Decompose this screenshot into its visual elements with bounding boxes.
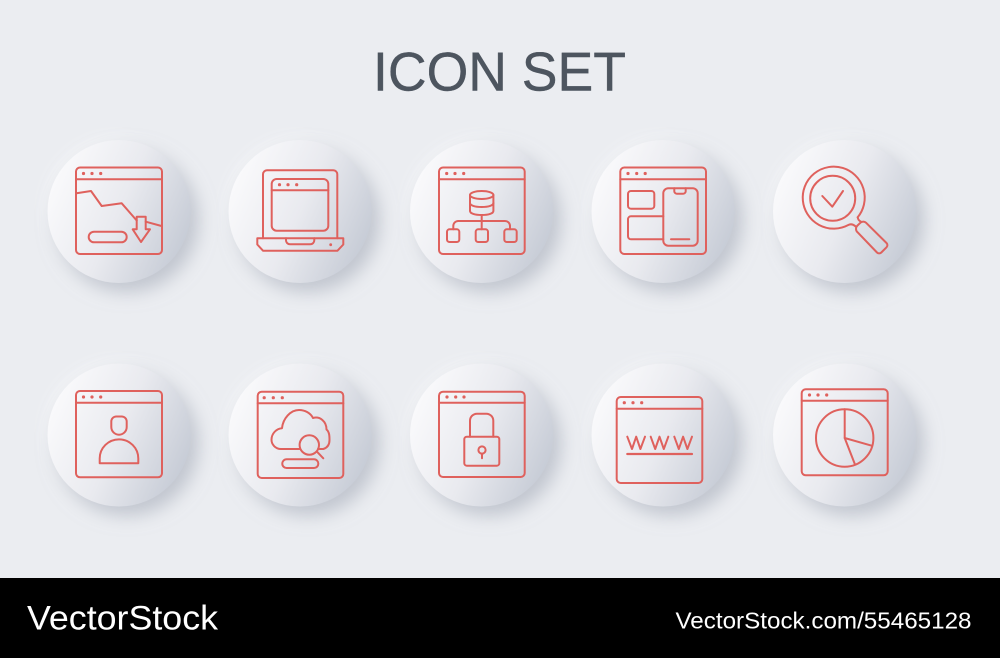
button: pie chart window (773, 364, 916, 506)
button: user profile window (48, 364, 190, 506)
icon: browser window with person (76, 391, 162, 477)
icon: browser window with database tree (439, 168, 525, 254)
title: ICON SET (373, 40, 626, 102)
footer bar (0, 578, 1000, 658)
button: database window (410, 140, 553, 283)
button: magnifier check (773, 140, 916, 283)
button: padlock window (410, 364, 553, 506)
button: cloud search window (228, 364, 372, 506)
button: www window (592, 364, 734, 506)
icon: magnifying glass with check mark (803, 167, 887, 253)
icon: browser window with padlock (439, 392, 525, 477)
button: chart decline window (48, 140, 190, 283)
icon: browser window with www address (617, 397, 702, 483)
icon: browser window with cloud and magnifier (258, 392, 343, 478)
footer brand: VectorStock (27, 600, 219, 638)
icon: browser window with pie chart (802, 389, 888, 475)
icon: browser window with phone (620, 168, 706, 254)
button: laptop (228, 140, 372, 283)
button: responsive layout (592, 140, 734, 283)
footer image URL: VectorStock.com/55465128 (676, 608, 972, 634)
icon: laptop with browser window (257, 170, 343, 251)
icon: browser window with falling chart (76, 168, 162, 254)
